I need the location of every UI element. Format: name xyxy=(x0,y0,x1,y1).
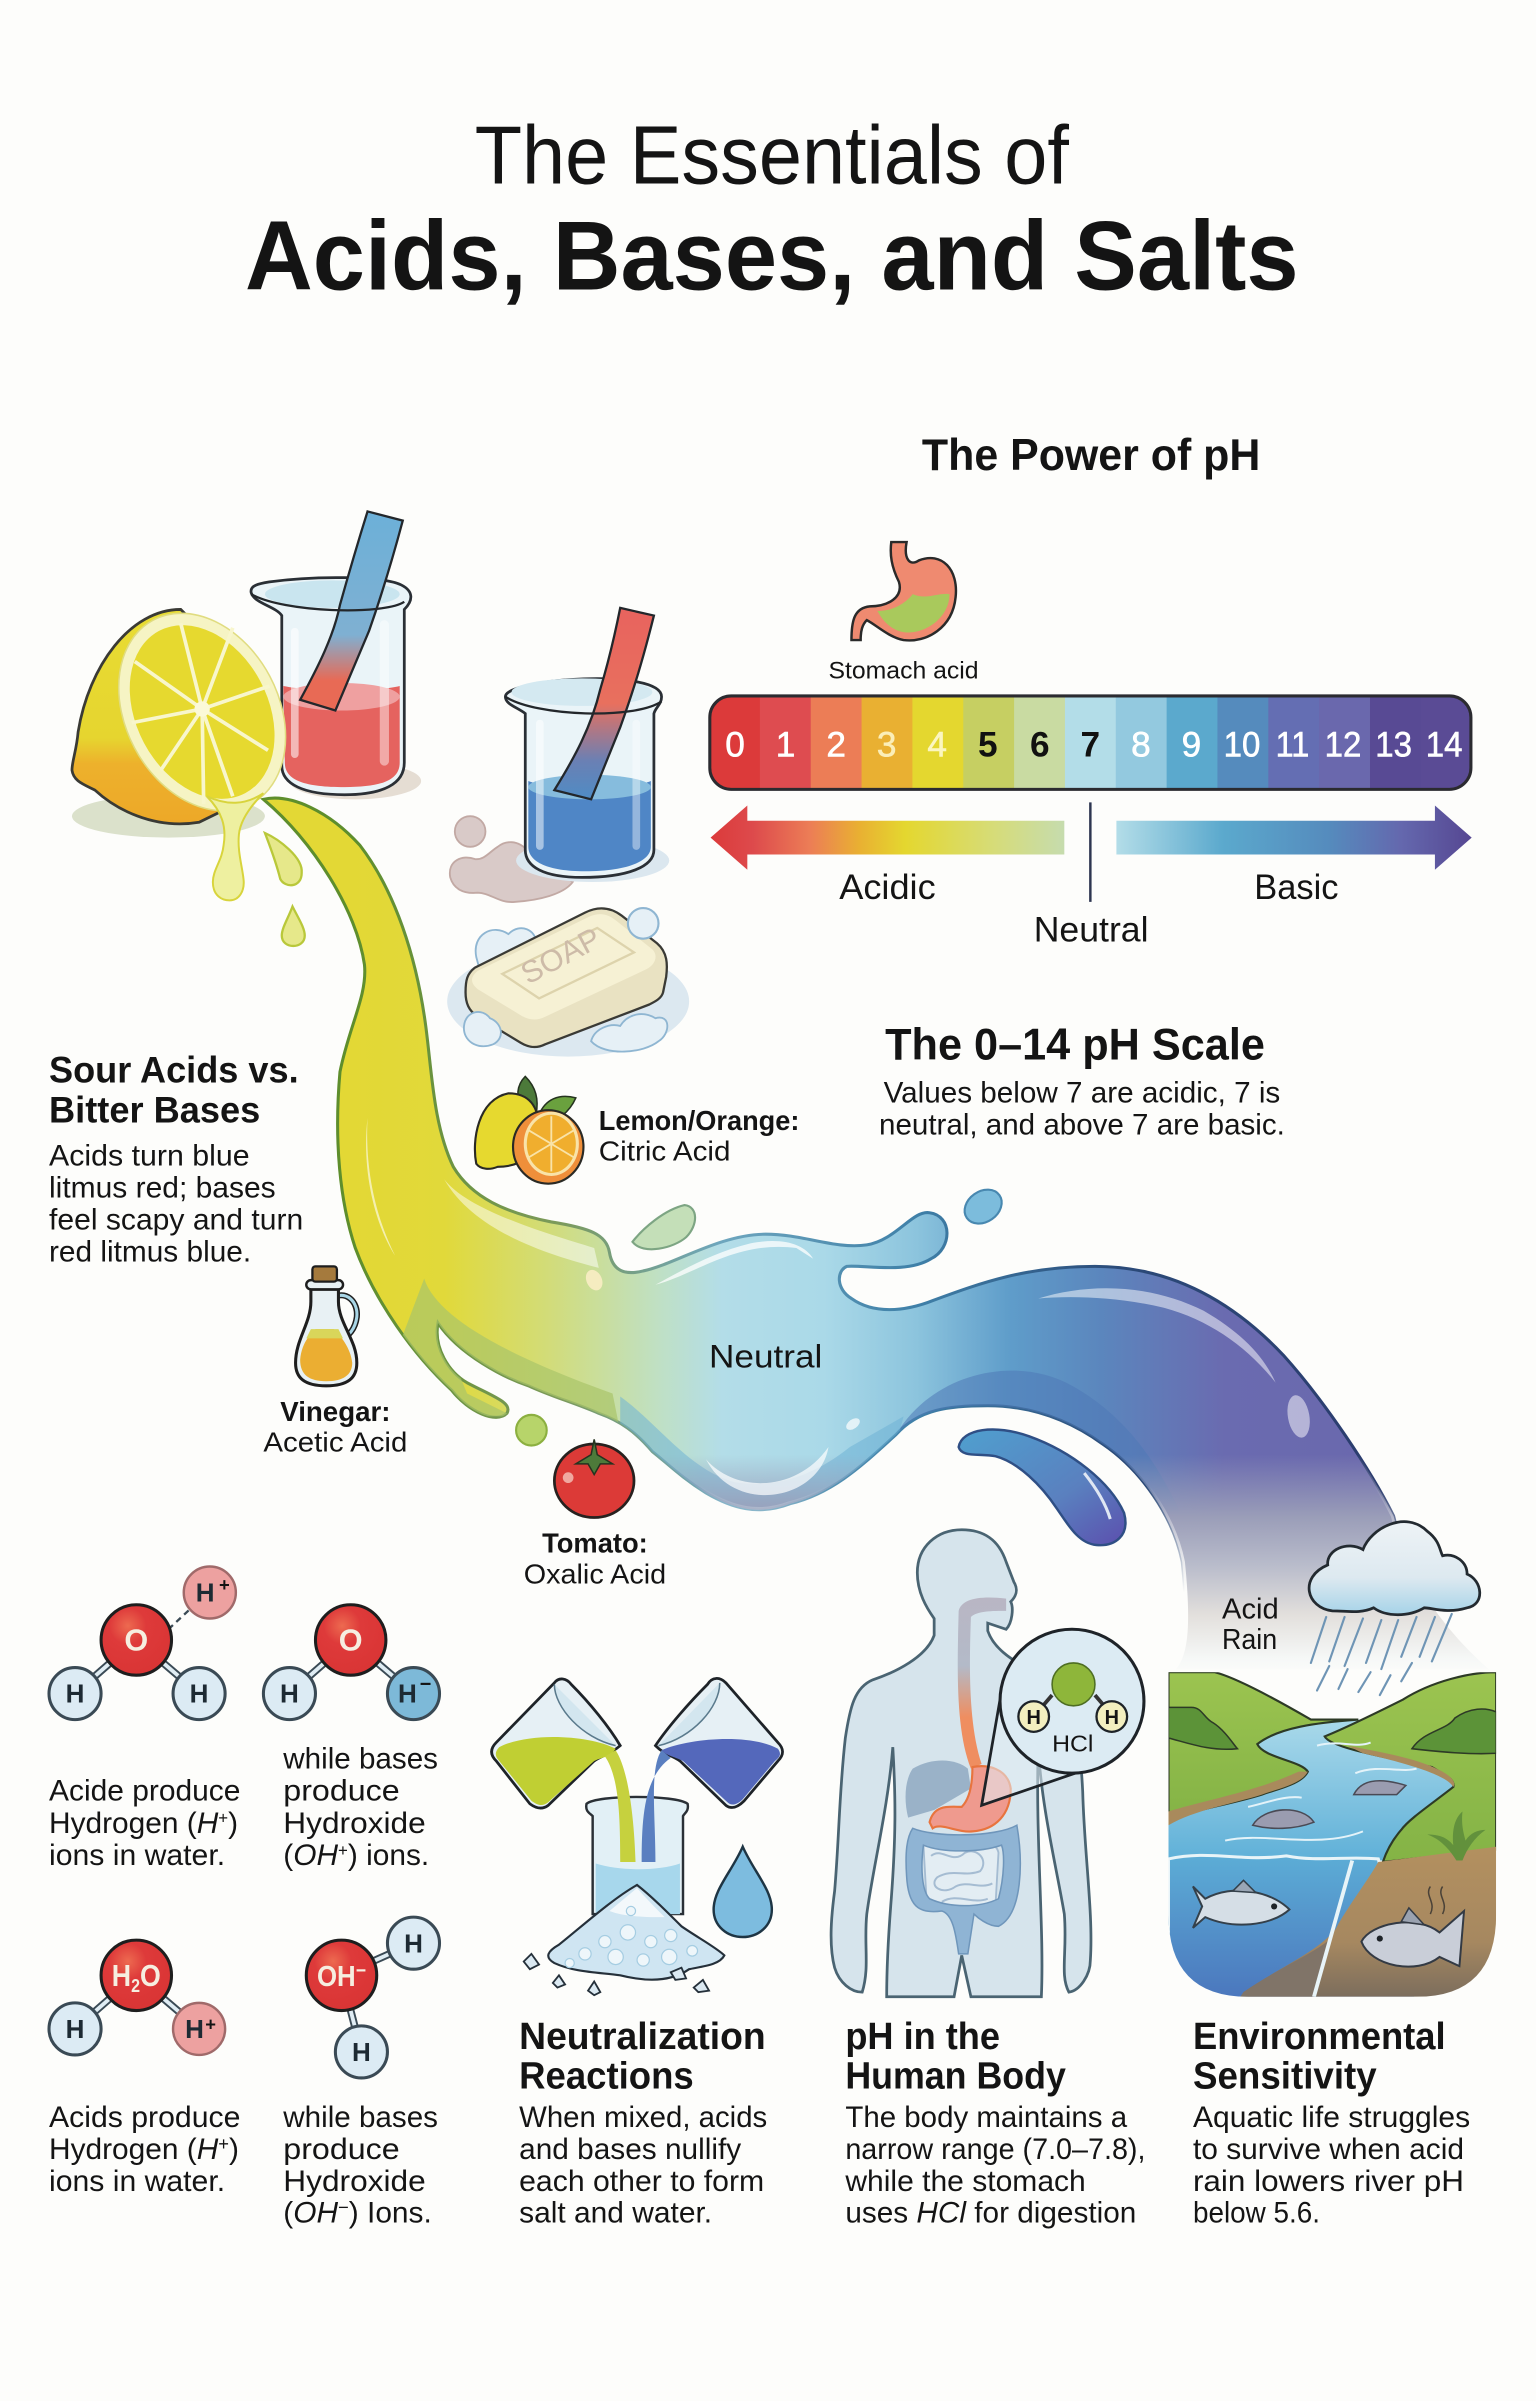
pH scale bar: 4 xyxy=(927,725,947,764)
text: acids produce hydrogen (lower): + xyxy=(218,2133,229,2154)
text block: neutralization reactions: each other to form xyxy=(519,2165,764,2198)
text block: pH in the human body xyxy=(844,2015,1145,2230)
molecule: water with hydroxide: H xyxy=(398,1679,417,1709)
right shrubs xyxy=(1412,1709,1496,1754)
pH scale bar: 7 xyxy=(1081,725,1100,764)
text block: the 0-14 pH scale xyxy=(879,1021,1285,1142)
soap bar xyxy=(447,908,689,1057)
HCl callout xyxy=(1000,1629,1144,1773)
beaker: acid with blue litmus strip xyxy=(251,511,421,799)
rock xyxy=(1240,1942,1328,1997)
molecule: water with H+ xyxy=(49,1566,236,1720)
molecule: water with hydroxide: H xyxy=(280,1679,299,1709)
label: acid rain xyxy=(1222,1594,1279,1656)
icon: rain cloud xyxy=(1309,1522,1480,1695)
pH scale bar: 12 xyxy=(1325,725,1361,764)
text: acids produce hydrogen (upper): + xyxy=(218,1809,228,1828)
label: lemon/orange citric acid xyxy=(599,1105,799,1167)
stream droplets xyxy=(516,1183,1125,1545)
HCl callout: H xyxy=(1027,1707,1041,1729)
neutral divider xyxy=(1089,802,1091,902)
body silhouette xyxy=(831,1530,1091,1997)
foam bubbles xyxy=(628,908,659,939)
base pour xyxy=(642,1750,671,1862)
highlight streaks xyxy=(366,1118,1313,1495)
pH scale bar: 2 xyxy=(826,725,846,764)
label: acidic: Acidic xyxy=(839,868,936,907)
droplets from lemon xyxy=(265,833,305,946)
molecule: hydroxide OH- xyxy=(306,1917,440,2078)
text block: pH in the human body: narrow range (7.0–7.8), xyxy=(845,2133,1145,2166)
text block: pH in the human body: pH in the xyxy=(845,2015,1000,2058)
stomach xyxy=(930,1766,1011,1832)
pH scale bar: 13 xyxy=(1375,725,1412,764)
soap bar: SOAP xyxy=(515,921,606,991)
text block: sour acids vs bitter bases: Sour Acids vs. xyxy=(49,1050,299,1091)
text: while bases produce hydroxide (lower): − xyxy=(338,2196,349,2217)
label: neutral: Neutral xyxy=(1034,911,1149,950)
pH scale bar: 8 xyxy=(1131,725,1151,764)
text: acids produce hydrogen (lower): ) xyxy=(229,2133,239,2166)
molecule: H2O with H+: + xyxy=(205,2013,216,2034)
HCl callout: H xyxy=(1105,1707,1119,1729)
pH scale bar: 10 xyxy=(1224,725,1260,764)
text block: the 0-14 pH scale: Values below 7 are acidic, 7 is xyxy=(884,1077,1280,1109)
pH scale bar: 0 xyxy=(725,725,745,764)
illustration: environmental river scene xyxy=(1168,1672,1496,2006)
divider xyxy=(1314,1860,1352,1997)
label: acid rain: Acid xyxy=(1222,1594,1279,1626)
text: while bases produce hydroxide (lower): (OH xyxy=(283,2197,338,2230)
icon: lemon and orange xyxy=(475,1076,583,1184)
molecule: water with H+: H xyxy=(66,1679,84,1709)
text block: neutralization reactions: Reactions xyxy=(519,2055,694,2098)
receiving beaker xyxy=(586,1797,688,1914)
pH scale bar: 9 xyxy=(1182,725,1201,764)
molecule: hydroxide OH-: OH xyxy=(317,1961,361,1993)
illustration: human body xyxy=(831,1530,1144,1997)
river xyxy=(1168,1720,1452,1860)
text block: environmental sensitivity: Aquatic life struggles xyxy=(1193,2101,1470,2134)
salt crystals xyxy=(524,1954,709,1995)
text block: sour acids vs bitter bases: feel scapy and turn xyxy=(49,1204,303,1237)
underwater xyxy=(1168,1855,1417,2006)
text block: neutralization reactions: salt and water. xyxy=(519,2197,712,2230)
text: acids produce hydrogen (lower): Hydrogen (H xyxy=(49,2133,218,2166)
label: tomato oxalic acid xyxy=(524,1528,666,1589)
icon: tomato xyxy=(554,1439,634,1517)
molecule: hydroxide OH-: − xyxy=(356,1960,366,1982)
text block: sour acids vs bitter bases: red litmus blue. xyxy=(49,1236,251,1269)
text: acids produce hydrogen (upper): Acide produce xyxy=(49,1775,240,1808)
text: acids produce hydrogen (lower) xyxy=(49,2101,240,2198)
text: acids produce hydrogen (upper): Hydrogen (H xyxy=(49,1807,218,1840)
text block: pH in the human body: uses HCl for digestion xyxy=(845,2197,1136,2230)
illustration: neutralization mixing xyxy=(492,1678,783,1995)
label: vinegar acetic acid xyxy=(263,1396,407,1458)
text block: the 0-14 pH scale: neutral, and above 7 are basic. xyxy=(879,1109,1285,1142)
label: tomato oxalic acid: Tomato: xyxy=(542,1528,648,1559)
left hill xyxy=(1168,1672,1358,1819)
HCl callout: HCl xyxy=(1052,1731,1093,1757)
salt pile xyxy=(548,1885,724,1980)
pH scale bar xyxy=(709,695,1473,790)
molecule: water with H+: H xyxy=(196,1578,215,1608)
text block: pH in the human body: Human Body xyxy=(845,2055,1067,2098)
pH scale bar: 1 xyxy=(776,725,795,764)
text block: environmental sensitivity: below 5.6. xyxy=(1193,2197,1320,2230)
text block: pH in the human body: while the stomach xyxy=(844,2165,1086,2198)
beaker pouring acid xyxy=(492,1679,620,1808)
molecule: water with hydroxide xyxy=(263,1605,440,1720)
molecule: H2O with H+: H xyxy=(185,2014,204,2044)
beaker: base with red litmus strip xyxy=(505,608,669,882)
molecule: H2O with H+: O xyxy=(140,1959,161,1993)
text: while bases produce hydroxide (upper): Hydroxide xyxy=(283,1807,426,1840)
text block: neutralization reactions: When mixed, acids xyxy=(519,2101,767,2134)
water ripples xyxy=(1225,1743,1417,1841)
text: acids produce hydrogen (lower): ions in water. xyxy=(49,2165,225,2198)
text: while bases produce hydroxide (upper): produce xyxy=(283,1775,400,1808)
title: The Essentials of xyxy=(475,109,1070,202)
label: vinegar acetic acid: Acetic Acid xyxy=(263,1427,407,1458)
icon: stomach xyxy=(851,542,956,640)
pH scale bar: 5 xyxy=(978,725,998,764)
text block: sour acids vs bitter bases: litmus red; bases xyxy=(49,1171,276,1204)
text: while bases produce hydroxide (upper): ) ions. xyxy=(348,1839,429,1872)
dead fish xyxy=(1361,1886,1464,1967)
liquid stream from acid to base xyxy=(263,798,1496,1672)
esophagus xyxy=(958,1598,1006,1769)
molecule: hydroxide OH-: H xyxy=(352,2037,371,2067)
soap body xyxy=(466,908,667,1047)
text: acids produce hydrogen (lower): Acids produce xyxy=(49,2101,240,2134)
text block: environmental sensitivity: Sensitivity xyxy=(1193,2055,1377,2098)
text block: pH in the human body: The body maintains a xyxy=(845,2101,1127,2134)
label: acid rain: Rain xyxy=(1222,1624,1277,1656)
title: Acids, Bases, and Salts xyxy=(245,200,1299,310)
live fish xyxy=(1193,1880,1289,1928)
text block: sour acids vs bitter bases: Acids turn blue xyxy=(49,1139,250,1172)
soil xyxy=(1234,1847,1496,2006)
text block: the 0-14 pH scale: The 0–14 pH Scale xyxy=(885,1021,1265,1070)
molecule: H2O with H+: H xyxy=(112,1959,134,1993)
molecule: water with H+: H xyxy=(190,1679,208,1709)
text block: environmental sensitivity: rain lowers river pH xyxy=(1193,2165,1464,2198)
text: acids produce hydrogen (upper): ) xyxy=(228,1807,238,1840)
molecule: water with hydroxide: − xyxy=(420,1674,431,1695)
text: acids produce hydrogen (upper): ions in water. xyxy=(49,1839,225,1872)
beaker pouring base xyxy=(655,1678,783,1808)
text block: environmental sensitivity xyxy=(1193,2015,1470,2230)
right bank xyxy=(1348,1746,1454,1787)
text block: neutralization reactions xyxy=(519,2015,767,2230)
molecule: water with H+: + xyxy=(219,1574,230,1595)
text: while bases produce hydroxide (upper) xyxy=(282,1743,438,1872)
surface fish xyxy=(1253,1810,1314,1828)
callout pointer xyxy=(982,1700,1080,1805)
soapy residue xyxy=(450,816,573,902)
liver xyxy=(906,1761,971,1818)
text block: neutralization reactions: Neutralization xyxy=(519,2015,766,2058)
text: while bases produce hydroxide (lower): ) Ions. xyxy=(349,2197,432,2230)
text block: sour acids vs bitter bases: Bitter Bases xyxy=(49,1089,260,1130)
right hill xyxy=(1325,1672,1496,1862)
text: while bases produce hydroxide (lower): produce xyxy=(283,2133,400,2166)
label: vinegar acetic acid: Vinegar: xyxy=(280,1396,391,1427)
pH scale bar: 11 xyxy=(1276,725,1309,764)
text block: neutralization reactions: and bases nullify xyxy=(519,2133,741,2166)
pH scale bar: 14 xyxy=(1426,725,1462,764)
text: while bases produce hydroxide (upper): (OH xyxy=(283,1839,338,1872)
label: tomato oxalic acid: Oxalic Acid xyxy=(524,1558,666,1589)
pH scale bar: 6 xyxy=(1030,725,1050,764)
text: while bases produce hydroxide (lower) xyxy=(282,2101,438,2230)
molecule: H2O with H+: H xyxy=(66,2014,84,2044)
beaker water xyxy=(596,1864,680,1914)
label: stomach acid: Stomach acid xyxy=(828,657,979,684)
molecule: water with hydroxide: O xyxy=(339,1624,363,1658)
arrow: basic xyxy=(1116,805,1472,870)
text: while bases produce hydroxide (lower): while bases xyxy=(282,2101,438,2134)
text: while bases produce hydroxide (upper): while bases xyxy=(282,1743,438,1776)
text block: environmental sensitivity: to survive when acid xyxy=(1193,2133,1464,2166)
molecule: H2O with H+ xyxy=(49,1940,225,2055)
molecule: H2O with H+: 2 xyxy=(131,1975,140,1996)
colon xyxy=(906,1825,1020,1954)
text: while bases produce hydroxide (upper): + xyxy=(338,1841,348,1860)
left shrubs xyxy=(1168,1707,1237,1749)
text: acids produce hydrogen (upper) xyxy=(49,1775,240,1872)
label: neutral on stream: Neutral xyxy=(709,1338,822,1374)
acid pour xyxy=(605,1750,636,1862)
back foam xyxy=(476,928,551,980)
label: basic: Basic xyxy=(1254,868,1338,907)
molecule: hydroxide OH-: H xyxy=(404,1928,423,1958)
small intestine xyxy=(923,1838,998,1911)
left bank xyxy=(1168,1772,1308,1825)
text: while bases produce hydroxide (lower): Hydroxide xyxy=(283,2165,426,2198)
molecule: water with H+: O xyxy=(124,1624,148,1658)
title xyxy=(245,109,1299,310)
label: lemon/orange citric acid: Lemon/Orange: xyxy=(599,1105,799,1136)
heading: the power of pH: The Power of pH xyxy=(922,431,1260,480)
label: lemon/orange citric acid: Citric Acid xyxy=(599,1136,730,1167)
arrow: acidic xyxy=(711,805,1064,870)
rain xyxy=(1311,1614,1452,1695)
pH scale bar: 3 xyxy=(877,725,896,764)
plant xyxy=(1427,1811,1485,1860)
lemon half xyxy=(72,584,319,900)
water drop xyxy=(714,1847,772,1937)
icon: vinegar bottle xyxy=(296,1266,357,1386)
text block: environmental sensitivity: Environmental xyxy=(1193,2015,1446,2058)
text block: sour acids vs bitter bases xyxy=(49,1050,303,1269)
